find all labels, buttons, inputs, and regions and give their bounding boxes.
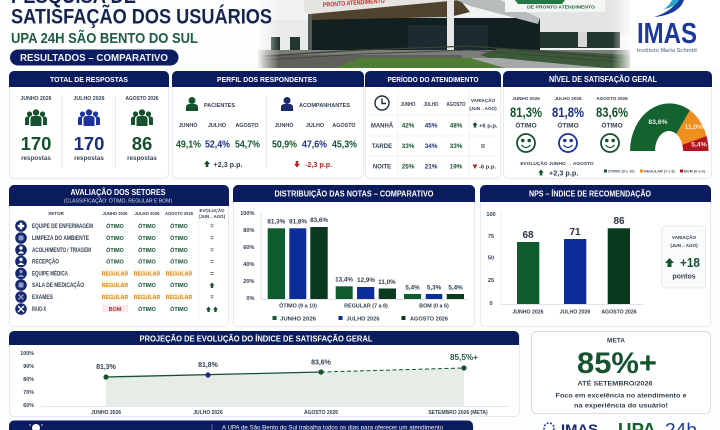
line chart: 60%: [23, 403, 34, 409]
panel header: NPS: NPS – ÍNDICE DE RECOMENDAÇÃO: [529, 190, 651, 198]
panel header: projeção: [9, 331, 519, 345]
row: tarde: =: [481, 142, 486, 151]
row: limpeza do ambiente: ÓTIMO: [106, 234, 124, 242]
row: noite: 19%: [450, 164, 463, 170]
bar chart: distribuição: 13,4%: [335, 276, 353, 284]
panel: NPS: [480, 185, 711, 326]
pill: resultados comparativo: RESULTADOS – COMPARATIVO: [20, 53, 168, 64]
row: sala de medicação: ÓTIMO: [138, 281, 156, 289]
panel header: avaliação: [9, 185, 229, 206]
gauge legend: REGULAR (7 e 8): [644, 170, 676, 174]
row: raio-x: BOM: [109, 307, 122, 313]
subtitle: UPA 24H SÃO BENTO DO SUL: [11, 29, 198, 47]
row: limpeza do ambiente: [15, 232, 214, 244]
group: pacientes: [176, 97, 260, 169]
row: acolhimento / triagem: ÓTIMO: [138, 246, 156, 254]
column: junho 81,3%: 81,3%: [510, 105, 542, 120]
row: exames: EXAMES: [32, 295, 53, 301]
row: recepção: RECEPÇÃO: [32, 258, 59, 266]
row: raio-x: ÓTIMO: [138, 305, 156, 313]
row: raio-x: [15, 303, 218, 315]
row: equipe médica: REGULAR: [166, 272, 192, 278]
line chart: [20, 351, 510, 416]
line chart: 80%: [23, 377, 34, 383]
column: junho 81,3%: JUNHO 2026: [512, 96, 540, 101]
column: julho 81,8%: JULHO 2026: [554, 96, 582, 101]
group: pacientes: JULHO: [208, 123, 226, 129]
callout: meta 85%+: META: [607, 338, 625, 344]
row: acolhimento / triagem: ÓTIMO: [170, 246, 188, 254]
bar chart: NPS: 25: [488, 278, 494, 284]
bar chart: NPS: JUNHO 2026: [512, 310, 544, 316]
panel header: período: PERÍODO DO ATENDIMENTO: [388, 75, 479, 84]
bar chart: distribuição: ÓTIMO (9 a 10): [279, 302, 317, 310]
row: acolhimento / triagem: ÓTIMO: [106, 246, 124, 254]
row: noite: 21%: [425, 164, 438, 170]
row: noite: -6 p.p.: [479, 164, 496, 170]
column: julho 81,8%: 81,8%: [552, 105, 584, 120]
gauge legend: ÓTIMO (9 e 10): [608, 168, 635, 174]
panel header: perfil: [172, 71, 364, 87]
bar chart: NPS: 86: [613, 216, 625, 227]
chart legend: JUNHO 2026: [280, 316, 317, 322]
bar chart: distribuição: 80%: [243, 228, 255, 234]
group: acompanhantes: JUNHO: [275, 123, 293, 129]
row: tarde: 33%: [402, 143, 415, 150]
column: agosto: [126, 96, 158, 162]
chart legend: AGOSTO 2026: [410, 316, 449, 322]
gauge chart: [630, 103, 708, 151]
column: junho: 170: [21, 133, 51, 154]
line chart: 90%: [23, 364, 34, 370]
row: noite: [373, 164, 496, 170]
pill: resultados comparativo: [10, 50, 178, 66]
row: raio-x: ÓTIMO: [170, 305, 188, 313]
row: exames: [15, 291, 214, 303]
bar chart: distribuição: 0%: [246, 296, 255, 302]
row: manhã: MANHÃ: [371, 122, 394, 130]
callout: meta 85%+: 85%+: [577, 347, 657, 380]
bar chart: NPS: JULHO 2026: [560, 310, 590, 316]
panel: nível de satisfação geral: [503, 71, 712, 178]
row: exames: REGULAR: [134, 295, 160, 301]
table header: EVOLUÇÃO: [200, 208, 225, 213]
panel header: perfil: PERFIL DOS RESPONDENTES: [217, 75, 317, 84]
evolution note: +2,3 p.p.: [549, 168, 578, 178]
column: agosto 83,6%: AGOSTO 2026: [596, 96, 628, 101]
logo: IMAS small: [544, 421, 598, 430]
table header: SETOR: [48, 211, 65, 216]
bar chart: distribuição: 5,3%: [427, 284, 442, 292]
line chart: 70%: [23, 390, 34, 396]
bar chart: NPS: 50: [488, 256, 494, 262]
table header: VARIAÇÃO: [471, 97, 496, 103]
row: sala de medicação: [15, 279, 215, 291]
row: manhã: 45%: [425, 122, 438, 130]
bar chart: NPS: 100: [486, 212, 496, 218]
group: acompanhantes: 45,3%: [332, 140, 357, 150]
row: noite: NOITE: [373, 164, 391, 170]
group: acompanhantes: JULHO: [306, 123, 324, 129]
row: limpeza do ambiente: ÓTIMO: [138, 234, 156, 242]
bar chart: distribuição: 12,9%: [357, 277, 375, 284]
bar chart: distribuição: 100%: [240, 211, 255, 217]
bar chart: NPS: AGOSTO 2026: [601, 310, 637, 316]
logo: UPA 24h: [618, 420, 697, 430]
row: tarde: 33%: [450, 143, 463, 150]
column: julho 81,8%: [552, 96, 584, 152]
bar chart: distribuição: BOM (0 a 6): [419, 304, 449, 310]
row: sala de medicação: ÓTIMO: [170, 281, 188, 289]
panel header: avaliação: (CLASSIFICAÇÃO: ÓTIMO, REGULAR E BOM): [64, 198, 172, 204]
bar chart: distribuição: 5,4%: [448, 284, 463, 292]
photo: UPA building: DE PRONTO ATENDIMENTO: [527, 4, 595, 10]
line chart: 85,5%+: [450, 353, 478, 362]
line chart: SETEMBRO 2026 (META): [428, 410, 488, 416]
gauge chart: 5,4%: [691, 142, 707, 148]
row: equipe de enfermagem: EQUIPE DE ENFERMAGEM: [32, 224, 93, 230]
logo: IMAS: IMAS: [637, 18, 697, 50]
column: junho: JUNHO 2026: [20, 96, 52, 102]
bar chart: distribuição: 40%: [243, 262, 255, 268]
panel: período do atendimento: [365, 71, 501, 178]
row: equipe de enfermagem: ÓTIMO: [170, 222, 188, 230]
column: julho 81,8%: ÓTIMO: [557, 120, 579, 130]
group: acompanhantes: -2,3 p.p.: [305, 160, 332, 169]
bar chart: NPS: 68: [522, 230, 534, 241]
banner: mensagem final: [9, 420, 473, 430]
line chart: 81,8%: [198, 362, 219, 369]
column: agosto: respostas: [127, 155, 157, 162]
title: SATISFAÇÃO DOS USUÁRIOS: [11, 4, 272, 29]
row: recepção: ÓTIMO: [106, 258, 124, 266]
column: julho: 170: [74, 133, 104, 154]
row: recepção: ÓTIMO: [138, 258, 156, 266]
row: acolhimento / triagem: ACOLHIMENTO / TRIAGEM: [32, 248, 91, 254]
bar chart: distribuição: REGULAR (7 a 8): [344, 304, 388, 310]
row: recepção: =: [210, 260, 214, 266]
bar chart: NPS: [486, 212, 643, 316]
panel header: total de respostas: TOTAL DE RESPOSTAS: [50, 75, 128, 84]
logo: IMAS: Instituto Maria Schmitt: [637, 48, 697, 54]
row: sala de medicação: SALA DE MEDICAÇÃO: [32, 282, 84, 289]
table header: JUNHO 2026: [102, 211, 128, 216]
group: pacientes: 54,7%: [235, 140, 260, 150]
panel: distribuição das notas: [233, 185, 475, 326]
column: julho: [74, 96, 104, 162]
chart legend: [272, 316, 449, 322]
table header: (JUN→AGO): [199, 214, 226, 219]
row: manhã: 48%: [450, 122, 463, 130]
gauge chart: 11,0%: [685, 124, 703, 131]
chart legend: JULHO 2026: [346, 316, 380, 322]
bar chart: distribuição: 11,0%: [378, 279, 396, 286]
row: equipe de enfermagem: =: [210, 224, 214, 230]
photo: UPA building: [255, 0, 720, 68]
row: equipe médica: [15, 268, 214, 279]
bar chart: distribuição: 60%: [243, 245, 255, 251]
line chart: 83,6%: [311, 360, 332, 366]
group: pacientes: JUNHO: [179, 123, 197, 129]
row: tarde: [372, 142, 486, 151]
column: agosto 83,6%: ÓTIMO: [601, 120, 623, 130]
bar chart: NPS: 71: [569, 227, 581, 238]
icon: light bulb: [29, 424, 43, 430]
row: equipe de enfermagem: ÓTIMO: [106, 222, 124, 230]
group: acompanhantes: ACOMPANHANTES: [299, 103, 350, 109]
bar chart: NPS: 75: [488, 234, 494, 240]
panel header: total de respostas: [9, 71, 169, 87]
bar chart: distribuição: 20%: [243, 279, 255, 285]
column: agosto 83,6%: [596, 96, 628, 152]
callout: variação: pontos: [672, 274, 696, 280]
row: exames: =: [210, 295, 214, 301]
logo: IMAS: [637, 0, 697, 54]
table header: (JUN→AGO): [469, 106, 497, 111]
column: junho: [20, 96, 52, 162]
table header: JULHO: [424, 102, 439, 108]
column: julho: respostas: [74, 155, 104, 162]
row: tarde: TARDE: [372, 144, 392, 150]
row: manhã: 42%: [402, 122, 415, 130]
column: agosto: 86: [132, 133, 152, 154]
panel header: NPS: [480, 185, 711, 202]
column: junho 81,3%: ÓTIMO: [515, 120, 537, 130]
row: manhã: [371, 122, 498, 130]
line chart: 81,3%: [96, 364, 117, 371]
column: junho: respostas: [21, 155, 51, 162]
callout: variação: (JUN→AGO): [670, 243, 698, 248]
group: acompanhantes: [272, 97, 357, 169]
bar chart: distribuição: 81,3%: [267, 218, 286, 226]
row: equipe médica: EQUIPE MÉDICA: [32, 270, 68, 278]
callout: variação: +18: [680, 256, 700, 270]
group: pacientes: PACIENTES: [204, 103, 235, 109]
row: equipe de enfermagem: ÓTIMO: [138, 222, 156, 230]
panel: avaliação dos setores: [9, 185, 229, 326]
row: limpeza do ambiente: ÓTIMO: [170, 234, 188, 242]
line chart: AGOSTO 2026: [304, 410, 338, 416]
bar chart: distribuição: [240, 211, 468, 310]
callout: meta 85%+: [532, 332, 710, 414]
callout: meta 85%+: na experiência do usuário!: [574, 402, 668, 410]
column: julho: JULHO 2026: [74, 96, 104, 102]
table header: JUNHO: [400, 102, 416, 108]
panel header: nível: NÍVEL DE SATISFAÇÃO GERAL: [549, 75, 657, 84]
footer logos: [544, 420, 697, 430]
row: sala de medicação: REGULAR: [102, 283, 128, 289]
table header: AGOSTO 2026: [165, 211, 193, 216]
column: junho 81,3%: [510, 96, 542, 152]
column: agosto: AGOSTO 2026: [126, 96, 158, 102]
row: exames: REGULAR: [166, 295, 192, 301]
panel header: projeção: PROJEÇÃO DE EVOLUÇÃO DO ÍNDICE DE SATISFAÇÃO GERAL: [140, 334, 373, 344]
group: pacientes: AGOSTO: [235, 123, 259, 129]
callout: meta 85%+: ATÉ SETEMBRO/2026: [578, 378, 653, 388]
row: acolhimento / triagem: =: [210, 248, 214, 254]
table header: [400, 97, 497, 111]
row: recepção: ÓTIMO: [170, 258, 188, 266]
panel: perfil dos respondentes: [172, 71, 364, 178]
bar chart: NPS: 0: [489, 301, 493, 307]
row: recepção: [15, 256, 214, 267]
panel header: nível: [503, 71, 712, 87]
line chart: JUNHO 2026: [91, 410, 121, 416]
gauge legend: [604, 168, 706, 174]
table header: AGOSTO: [446, 102, 466, 108]
table header: JULHO 2026: [134, 211, 160, 216]
row: limpeza do ambiente: =: [210, 236, 214, 242]
line chart: 100%: [20, 351, 34, 357]
panel: projeção de evolução: [9, 331, 520, 416]
panel header: distribuição: DISTRIBUIÇÃO DAS NOTAS – COMPARATIVO: [274, 190, 434, 198]
table header: [48, 208, 226, 219]
bar chart: distribuição: 5,4%: [405, 284, 420, 292]
row: exames: REGULAR: [102, 295, 128, 301]
group: pacientes: +2,3 p.p.: [214, 160, 242, 169]
group: pacientes: 49,1%: [176, 140, 201, 150]
group: pacientes: 52,4%: [205, 140, 230, 150]
row: acolhimento / triagem: [15, 244, 214, 256]
bar chart: distribuição: 83,6%: [310, 217, 328, 224]
evolution note: [520, 160, 594, 178]
row: equipe médica: REGULAR: [134, 272, 160, 278]
gauge chart: 83,6%: [648, 119, 668, 126]
row: raio-x: RAIO-X: [32, 307, 46, 313]
panel: total de respostas: [9, 71, 169, 178]
callout: variação: [662, 226, 706, 288]
panel header: avaliação: AVALIAÇÃO DOS SETORES: [70, 188, 166, 197]
line chart: JULHO 2026: [193, 410, 223, 416]
gauge legend: BOM (0 a 6): [684, 170, 706, 174]
row: noite: 25%: [402, 164, 415, 170]
row: limpeza do ambiente: LIMPEZA DO AMBIENTE: [32, 236, 89, 242]
evolution note: EVOLUÇÃO JUNHO → AGOSTO: [520, 160, 594, 167]
callout: meta 85%+: Foco em excelência no atendimento e: [556, 392, 687, 400]
group: acompanhantes: AGOSTO: [332, 123, 356, 129]
column: agosto 83,6%: 83,6%: [596, 105, 628, 120]
row: manhã: +6 p.p.: [479, 124, 498, 130]
group: acompanhantes: 47,6%: [302, 140, 327, 150]
icon: clock: [375, 96, 389, 110]
bar chart: distribuição: 81,8%: [289, 218, 307, 226]
group: acompanhantes: 50,9%: [272, 140, 297, 150]
row: equipe médica: =: [210, 272, 214, 278]
row: tarde: 34%: [425, 143, 438, 150]
panel header: distribuição: [233, 185, 475, 202]
row: equipe de enfermagem: [15, 220, 214, 232]
callout: variação: VARIAÇÃO: [672, 234, 697, 240]
row: equipe médica: REGULAR: [102, 272, 128, 278]
